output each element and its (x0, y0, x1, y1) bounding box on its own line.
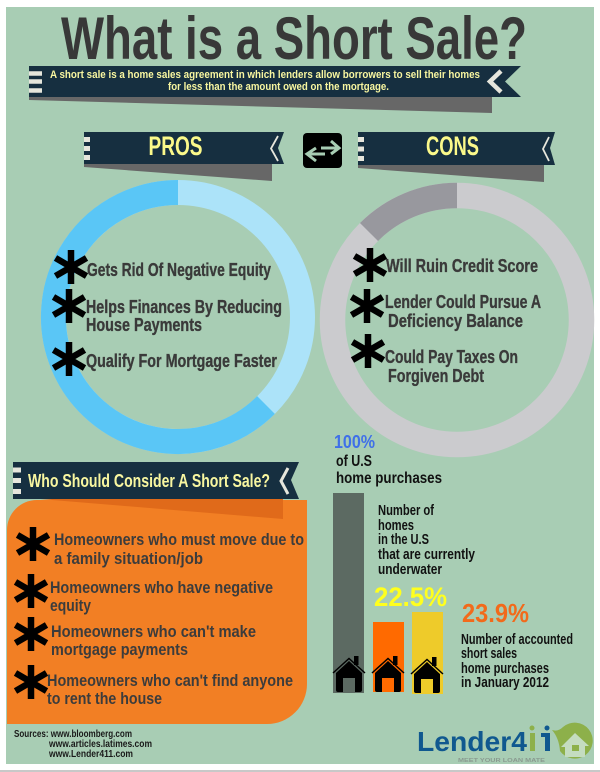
logo tagline: MEET YOUR LOAN MATE (458, 758, 545, 764)
definition text: A short sale is a home sales agreement in which lenders allow borrowers to sell their homes (50, 69, 480, 81)
sources: www.articles.latimes.com (48, 738, 152, 750)
cons item 2 (352, 289, 541, 331)
cons item 3 (352, 334, 518, 386)
underwater description (378, 503, 475, 578)
sources: Sources: www.bloomberg.com (14, 728, 132, 740)
underwater description: that are currently (378, 547, 475, 563)
who item 3: mortgage payments (51, 641, 188, 659)
cons item 2: Deficiency Balance (388, 311, 523, 331)
who item 4: Homeowners who can't find anyone (47, 672, 293, 690)
cons heading: CONS (426, 131, 479, 161)
pros banner (84, 131, 284, 181)
22.5% figure: 22.5% (374, 582, 447, 612)
panel: pros ring (53, 192, 302, 442)
logo emblem (552, 723, 593, 759)
who item 4: to rent the house (47, 690, 162, 708)
who item 2: Homeowners who have negative (50, 579, 273, 597)
100% label (334, 432, 442, 487)
panel: cons ring (332, 196, 582, 444)
short sales description: home purchases (461, 661, 549, 677)
sources: www.Lender411.com (48, 748, 133, 760)
pros item 3: Qualify For Mortgage Faster (86, 351, 277, 371)
23.9% figure: 23.9% (462, 598, 529, 628)
who item 3 (16, 617, 256, 659)
who should consider banner (13, 462, 299, 499)
pros item 2: Helps Finances By Reducing (86, 297, 282, 317)
definition text: for less than the amount owed on the mortgage. (168, 81, 389, 93)
who item 1: Homeowners who must move due to (54, 531, 304, 549)
icon: swap arrows (303, 133, 342, 168)
underwater description: underwater (378, 562, 442, 578)
pros item 1: Gets Rid Of Negative Equity (87, 260, 271, 280)
cons item 2: Lender Could Pursue A (385, 292, 541, 312)
short sales description (461, 632, 573, 691)
100% label: of U.S (336, 453, 372, 470)
pros item 3 (54, 342, 277, 376)
cons banner (358, 131, 555, 182)
bar chart (333, 493, 443, 694)
short sales description: in January 2012 (461, 675, 549, 691)
pros item 1 (56, 250, 271, 284)
who item 4 (16, 665, 293, 708)
who item 1 (18, 527, 304, 568)
who item 1: a family situation/job (54, 550, 203, 568)
100% label: home purchases (336, 470, 442, 487)
definition banner (29, 66, 521, 113)
short sales description: short sales (461, 646, 517, 662)
cons item 1: Will Ruin Credit Score (386, 256, 538, 276)
definition text (50, 69, 480, 93)
sources (14, 728, 152, 760)
panel: who should consider (7, 499, 307, 724)
underwater description: in the U.S (378, 532, 429, 548)
underwater description: homes (378, 518, 414, 534)
pros item 2: House Payments (86, 315, 202, 335)
bar: 100% (333, 493, 365, 693)
pros item 2 (54, 289, 282, 335)
logo (417, 723, 593, 764)
underwater description: Number of (378, 503, 434, 519)
who item 3: Homeowners who can't make (51, 623, 256, 641)
bar: 23.9% (411, 612, 443, 694)
who item 2: equity (50, 597, 92, 615)
cons item 3: Could Pay Taxes On (385, 347, 518, 367)
100% label: 100% (334, 432, 375, 452)
logo: Lender4 (417, 726, 527, 757)
pros heading: PROS (148, 131, 202, 161)
cons item 1 (354, 248, 538, 282)
who item 2 (16, 574, 273, 615)
cons item 3: Forgiven Debt (388, 366, 484, 386)
bar: 22.5% (372, 622, 404, 692)
who heading: Who Should Consider A Short Sale? (28, 470, 270, 491)
